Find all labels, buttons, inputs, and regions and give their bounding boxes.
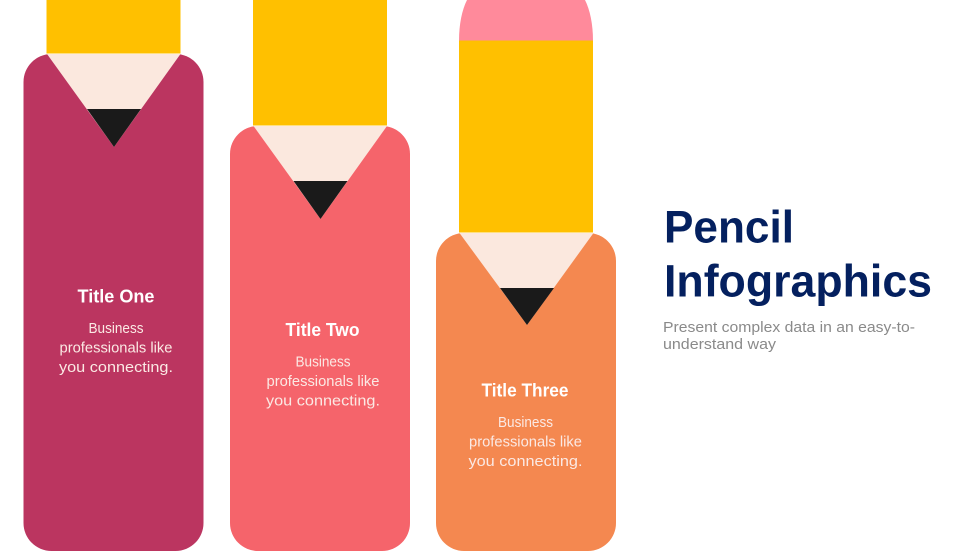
description one: you connecting. (59, 359, 173, 376)
body panel three (436, 233, 616, 551)
pencil wood tip two (254, 126, 387, 219)
title three: Title Three (482, 380, 568, 400)
pencil shaft one (46, 0, 180, 54)
subtitle: understand way (663, 336, 777, 353)
pencil lead one (87, 109, 141, 147)
pencil three (436, 0, 616, 551)
description one: Business (88, 320, 144, 337)
title one: Title One (78, 286, 154, 306)
pencil lead three (500, 288, 554, 325)
pencil one (24, 0, 204, 551)
description one: professionals like (60, 340, 172, 356)
description three: you connecting. (468, 453, 582, 470)
description two: you connecting. (266, 392, 380, 410)
pencil eraser (459, 0, 593, 41)
description three: professionals like (469, 434, 582, 450)
body panel one (24, 54, 204, 551)
subtitle (663, 319, 915, 353)
pencil wood tip three (460, 233, 594, 325)
main heading (664, 202, 932, 306)
description two: Business (296, 354, 350, 370)
description two (266, 354, 380, 410)
pencil shaft two (253, 0, 387, 126)
pencil two (230, 0, 410, 551)
body panel two (230, 126, 410, 551)
title two: Title Two (286, 319, 360, 340)
description three: Business (498, 414, 553, 431)
pencil shaft three (459, 40, 593, 232)
description one (59, 320, 173, 376)
subtitle: Present complex data in an easy-to- (663, 319, 915, 336)
pencil wood tip one (47, 54, 180, 147)
main heading: Infographics (664, 256, 932, 306)
main heading: Pencil (664, 202, 794, 252)
description two: professionals like (266, 373, 380, 390)
pencil lead two (294, 181, 348, 219)
description three (468, 414, 582, 470)
